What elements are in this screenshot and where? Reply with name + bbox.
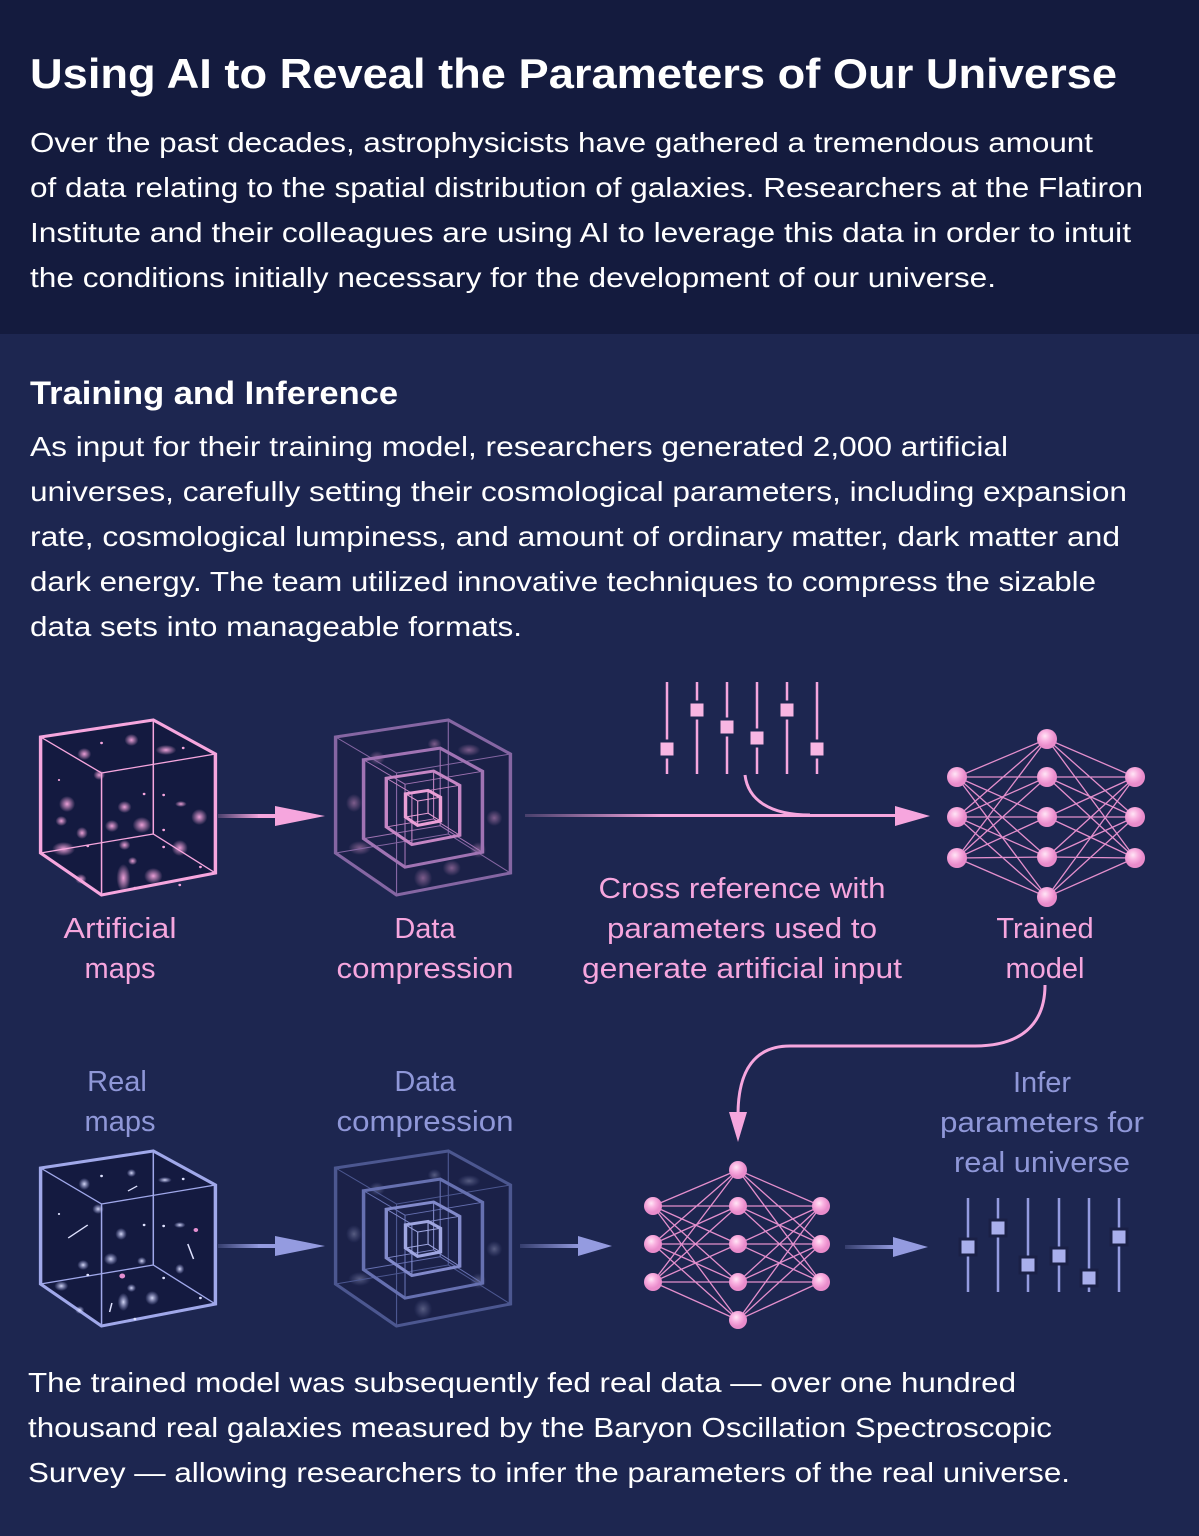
labels: bottom row: Data — [394, 1066, 456, 1098]
labels: top row: parameters used to — [607, 913, 877, 945]
labels: top row: Artificial — [64, 913, 176, 945]
intro text — [30, 127, 1143, 293]
labels: top row: generate artificial input — [582, 953, 902, 985]
intro text: of data relating to the spatial distribution of galaxies. Researchers at the Flatiron — [30, 172, 1143, 203]
labels: top row: maps — [85, 953, 155, 985]
training text: data sets into manageable formats. — [30, 611, 522, 642]
training text — [30, 431, 1127, 642]
conclusion text — [28, 1367, 1070, 1488]
conclusion text: thousand real galaxies measured by the Baryon Oscillation Spectroscopic — [28, 1412, 1052, 1443]
arrow: maps to compression — [218, 806, 325, 826]
icon: sliders (training parameters) — [659, 682, 825, 774]
labels: top row: compression — [336, 953, 514, 985]
labels: bottom row — [85, 1066, 1144, 1179]
intro text: Over the past decades, astrophysicists have gathered a tremendous amount — [30, 127, 1093, 158]
labels: bottom row: real universe — [954, 1147, 1130, 1179]
icon: trained model network — [947, 729, 1145, 907]
labels: top row: model — [1006, 953, 1084, 985]
arrow: real maps to compression — [218, 1236, 325, 1256]
labels: bottom row: parameters for — [940, 1107, 1144, 1139]
header background — [0, 0, 1199, 334]
icon: real maps cube — [41, 1151, 215, 1326]
labels: bottom row: maps — [85, 1106, 155, 1138]
labels: top row — [64, 873, 1094, 985]
icon: artificial maps cube — [41, 720, 215, 895]
arrow: compression to trained model — [525, 775, 930, 826]
intro text: Institute and their colleagues are using AI to leverage this data in order to intuit — [30, 217, 1131, 248]
labels: top row: Cross reference with — [598, 873, 886, 905]
heading: training and inference: Training and Inference — [30, 375, 398, 411]
labels: bottom row: Infer — [1013, 1067, 1071, 1099]
conclusion text: The trained model was subsequently fed real data — over one hundred — [28, 1367, 1016, 1398]
labels: top row: Data — [394, 913, 456, 945]
labels: top row: Trained — [996, 913, 1094, 945]
icon: data compression cube — [336, 720, 510, 895]
labels: bottom row: Real — [87, 1066, 147, 1098]
training text: dark energy. The team utilized innovative techniques to compress the sizable — [30, 566, 1096, 597]
training text: universes, carefully setting their cosmological parameters, including expansion — [30, 476, 1127, 507]
intro text: the conditions initially necessary for the development of our universe. — [30, 262, 996, 293]
arrow: trained model to inference network — [729, 985, 1045, 1142]
title: Using AI to Reveal the Parameters of Our Universe — [30, 50, 1117, 97]
icon: real data compression cube — [336, 1151, 510, 1326]
conclusion text: Survey — allowing researchers to infer the parameters of the real universe. — [28, 1457, 1070, 1488]
arrow: network to inferred parameters — [845, 1237, 928, 1257]
training text: As input for their training model, researchers generated 2,000 artificial — [30, 431, 1008, 462]
icon: inferred sliders — [960, 1198, 1127, 1292]
training text: rate, cosmological lumpiness, and amount of ordinary matter, dark matter and — [30, 521, 1120, 552]
icon: inference network — [644, 1161, 830, 1329]
arrow: compression to network — [520, 1236, 612, 1256]
labels: bottom row: compression — [336, 1106, 514, 1138]
